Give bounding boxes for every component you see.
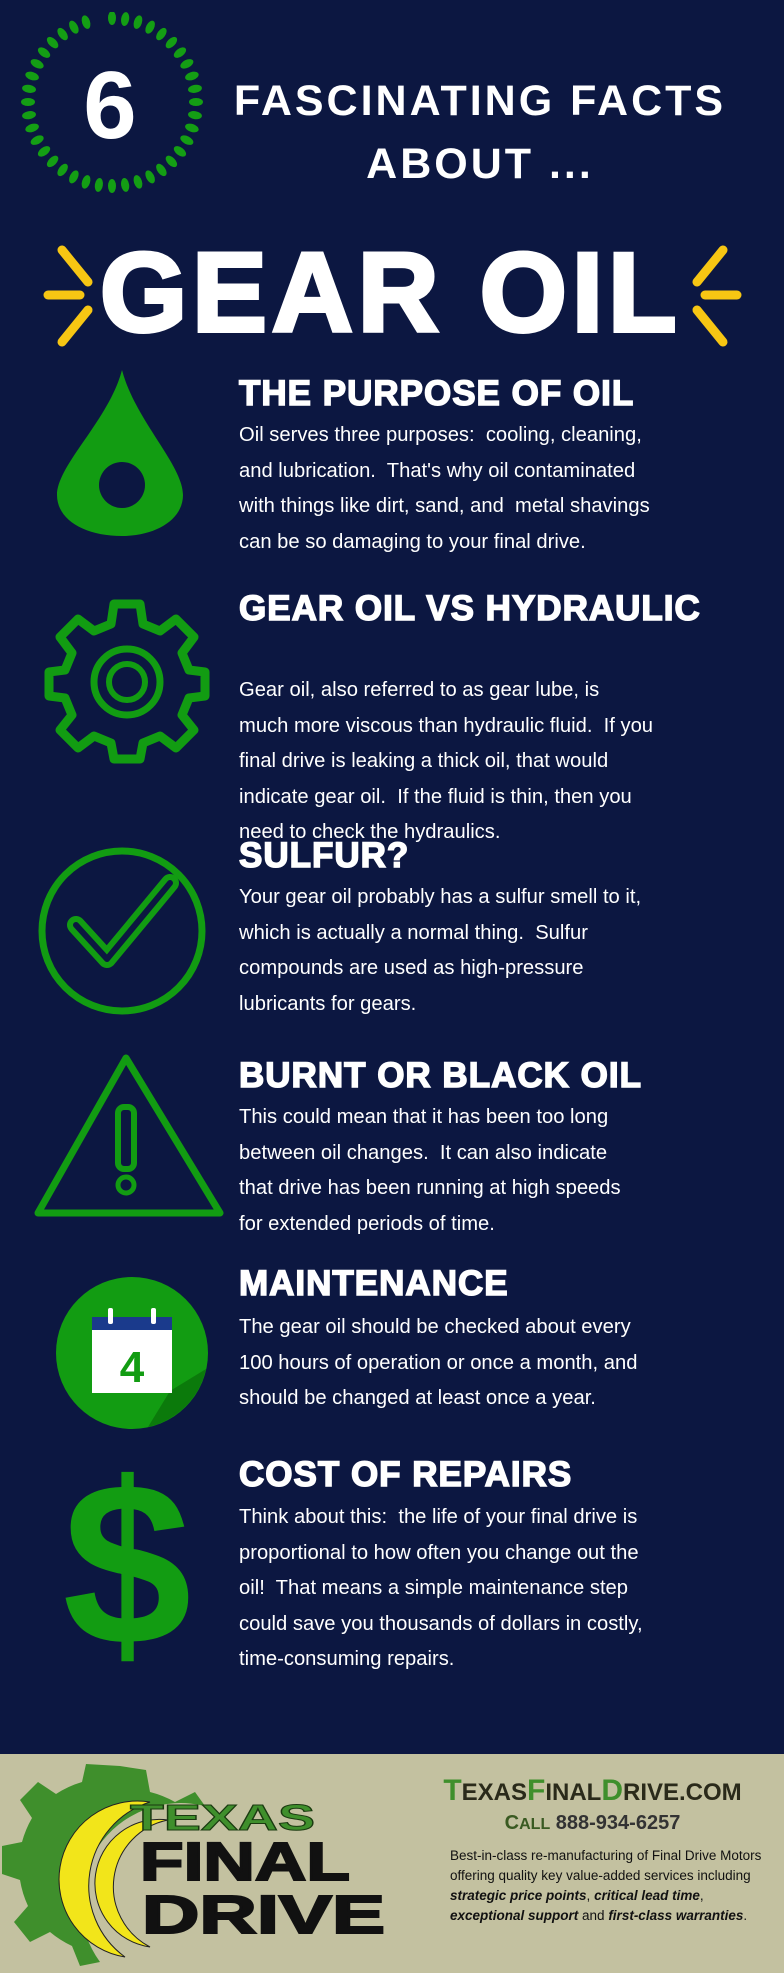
section 3 title: SULFUR? <box>239 836 409 875</box>
section 4 text: between oil changes. It can also indicate <box>239 1142 607 1164</box>
section 1 title: THE PURPOSE OF OIL <box>239 374 634 413</box>
header: GEAR OIL: GEAR OIL <box>100 230 681 355</box>
footer panel <box>0 1754 784 1973</box>
section 1 text: can be so damaging to your final drive. <box>239 530 586 552</box>
section 5 text <box>239 1316 637 1409</box>
section 1 text <box>239 424 650 552</box>
section 4 title: BURNT OR BLACK OIL <box>239 1056 642 1095</box>
section 1 text: Oil serves three purposes: cooling, cleaning, <box>239 424 642 446</box>
section 3 text <box>239 886 641 1014</box>
section 6 text: could save you thousands of dollars in costly, <box>239 1612 643 1634</box>
section 1 text: with things like dirt, sand, and metal shavings <box>239 495 650 517</box>
section 2 text: indicate gear oil. If the fluid is thin, then you <box>239 786 632 808</box>
section 1 text: and lubrication. That's why oil contaminated <box>239 460 635 482</box>
icon: warning triangle <box>34 1054 224 1216</box>
section 3 text: Your gear oil probably has a sulfur smell to it, <box>239 886 641 908</box>
section 3 text: compounds are used as high-pressure <box>239 957 584 979</box>
section 4 text: that drive has been running at high speeds <box>239 1177 621 1199</box>
header: title line: FASCINATING FACTS <box>234 77 726 125</box>
section 6 text: proportional to how often you change out the <box>239 1542 639 1564</box>
section 2 text: much more viscous than hydraulic fluid. If you <box>239 714 653 736</box>
section 5 text: The gear oil should be checked about every <box>239 1316 631 1338</box>
icon: calendar <box>56 1277 208 1429</box>
section 3 text: lubricants for gears. <box>239 992 416 1014</box>
header: title line <box>234 77 726 188</box>
footer: logo <box>2 1764 385 1966</box>
section 2 text: Gear oil, also referred to as gear lube, is <box>239 679 599 701</box>
section 6 text <box>239 1506 643 1670</box>
section 4 text: for extended periods of time. <box>239 1212 495 1234</box>
footer: description: Best-in-class re-manufacturing of Final Drive Motors offering quality key value-added services including strategic price points, critical lead time, exceptional support and first-class warranties. <box>450 1848 761 1923</box>
icon: calendar: 4 <box>120 1343 145 1392</box>
section 6 text: oil! That means a simple maintenance step <box>239 1577 628 1599</box>
footer: website: TEXASFINALDRIVE.COM <box>443 1774 742 1807</box>
section 5 text: 100 hours of operation or once a month, and <box>239 1352 637 1374</box>
footer: logo: FINAL <box>140 1832 350 1892</box>
icon: dollar: $ <box>62 1435 192 1694</box>
section 3 text: which is actually a normal thing. Sulfur <box>239 922 588 944</box>
header: rays <box>44 246 742 346</box>
icon: oil drop <box>57 370 183 536</box>
section 2 title: GEAR OIL VS HYDRAULIC <box>239 589 701 628</box>
section 5 text: should be changed at least once a year. <box>239 1387 596 1409</box>
section 4 text <box>239 1106 621 1234</box>
header: title line: ABOUT ... <box>366 140 594 188</box>
footer: phone: CALL 888-934-6257 <box>505 1812 680 1834</box>
section 6 text: time-consuming repairs. <box>239 1648 454 1670</box>
section 2 text: need to check the hydraulics. <box>239 821 500 843</box>
icon: check circle <box>38 848 206 1014</box>
footer: logo: TEXAS <box>130 1797 315 1838</box>
footer: logo: DRIVE <box>142 1885 385 1945</box>
section 6 text: Think about this: the life of your final drive is <box>239 1506 637 1528</box>
section 2 text: final drive is leaking a thick oil, that would <box>239 750 608 772</box>
icon: gear <box>44 600 210 764</box>
header: number badge: 6 <box>83 52 137 159</box>
section 5 title: MAINTENANCE <box>239 1264 509 1303</box>
section 4 text: This could mean that it has been too long <box>239 1106 608 1128</box>
section 2 text <box>239 679 653 843</box>
header: number badge <box>21 12 203 193</box>
section 6 title: COST OF REPAIRS <box>239 1455 572 1494</box>
